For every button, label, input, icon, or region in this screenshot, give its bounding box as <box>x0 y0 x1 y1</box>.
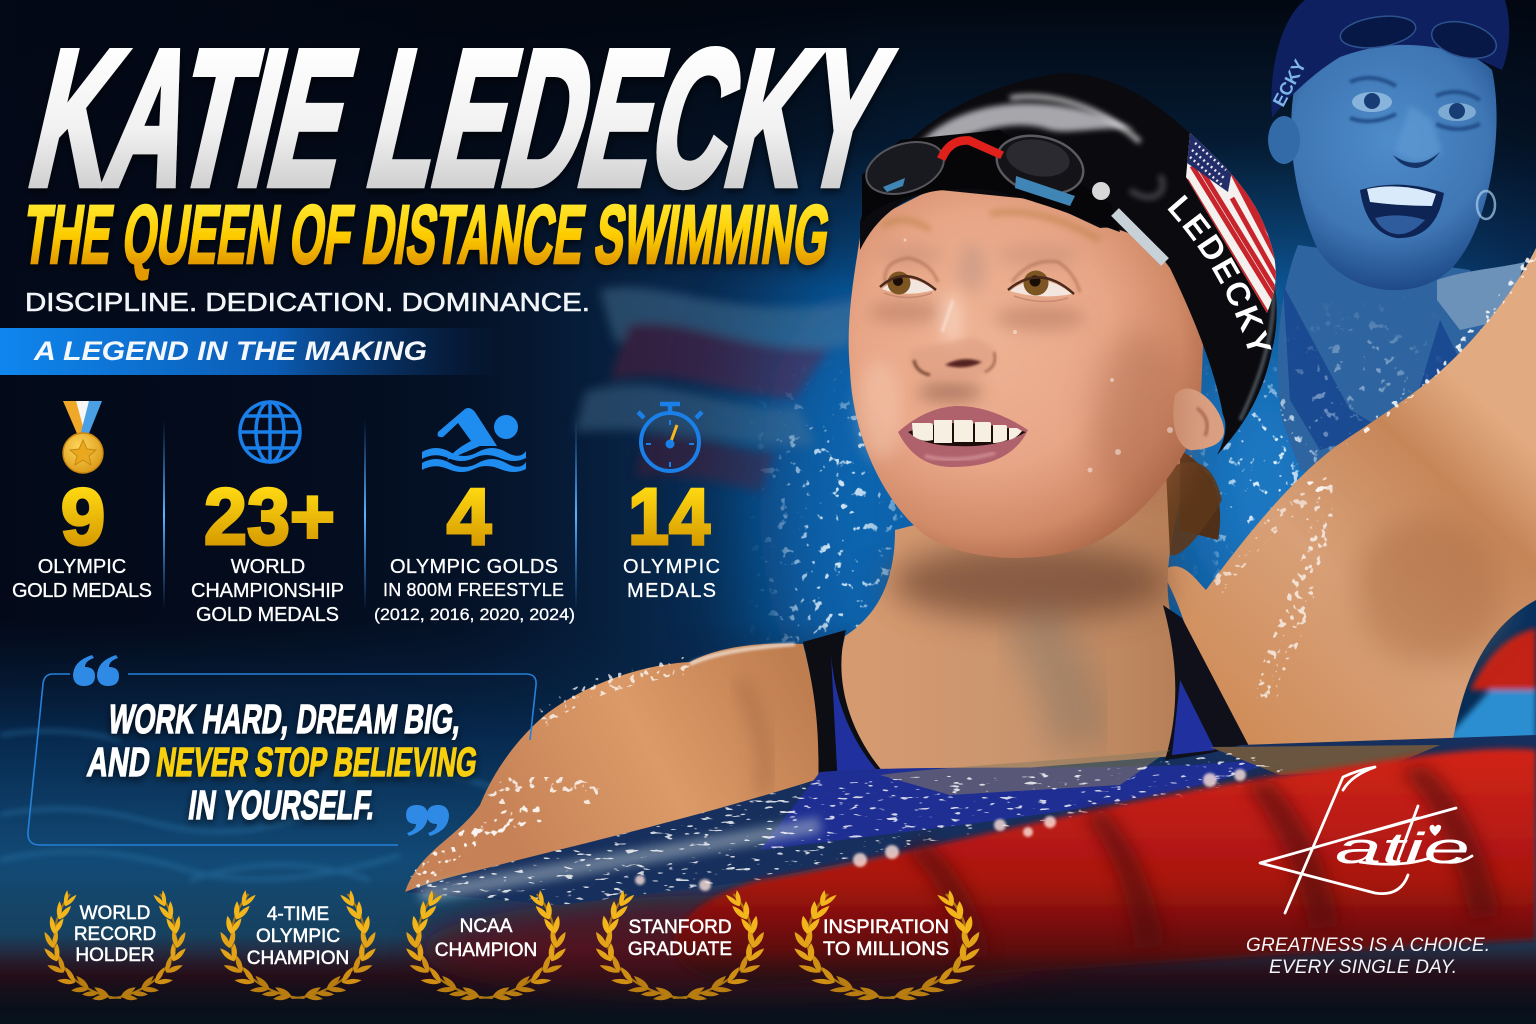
stat: 9 olympic gold medals: OLYMPIC <box>38 556 126 578</box>
quote text: IN YOURSELF. <box>186 782 378 828</box>
laurel wreath <box>404 890 568 1002</box>
quote text: AND <box>85 739 153 785</box>
stat: 23+ world championship gold medals: WORLD <box>231 556 305 578</box>
secondary portrait: blue-tinted celebrating swimmer: ECKY <box>1269 56 1310 110</box>
badge: inspiration to millions: INSPIRATION <box>823 917 949 938</box>
water surface with glints <box>405 735 1536 905</box>
stat: 9 olympic gold medals <box>12 401 152 602</box>
main portrait head <box>848 73 1277 558</box>
nose <box>909 300 996 380</box>
stat: 23+ world championship gold medals: 23+ <box>204 472 335 561</box>
stat: 23+ world championship gold medals: GOLD MEDALS <box>196 604 339 626</box>
raised right arm and shoulder <box>1162 248 1536 748</box>
water drops on face <box>904 238 1173 472</box>
icon: globe <box>240 402 300 462</box>
laurel wreath <box>218 890 378 1002</box>
stat: 14 olympic medals: MEDALS <box>627 580 716 602</box>
banner: a legend in the making: A LEGEND IN THE MAKING <box>33 336 427 366</box>
badge: NCAA champion <box>404 890 568 1002</box>
American flag on cap <box>1186 133 1276 313</box>
neck and chest <box>812 455 1250 785</box>
signature: Katie <box>1260 767 1472 913</box>
badge: world record holder: HOLDER <box>75 945 155 966</box>
badge: NCAA champion: NCAA <box>460 916 513 937</box>
lower pool water and ripples <box>0 620 1536 1024</box>
badge: world record holder: WORLD <box>80 903 150 924</box>
quote panel <box>28 655 536 845</box>
stat: 14 olympic medals <box>623 404 720 602</box>
facial shading <box>867 244 1086 402</box>
water splash around swimmer <box>790 330 1410 660</box>
smiling mouth <box>898 406 1028 467</box>
eyebrows <box>882 212 1100 240</box>
laurel wreath <box>594 890 766 1002</box>
quote text <box>85 696 480 828</box>
closing motto <box>1246 935 1490 978</box>
goggles on cap <box>860 127 1165 262</box>
red lane rope <box>0 749 1536 1024</box>
badge: inspiration to millions: TO MILLIONS <box>823 939 949 960</box>
badge: 4-time olympic champion: OLYMPIC <box>256 926 340 947</box>
stat: 4 olympic golds in 800m freestyle: (2012, 2016, 2020, 2024) <box>374 605 575 624</box>
badge: world record holder: RECORD <box>74 924 156 945</box>
badge: world record holder <box>42 890 188 1002</box>
laurel wreath <box>792 890 982 1002</box>
closing motto: EVERY SINGLE DAY. <box>1269 957 1457 978</box>
cap highlights <box>915 97 1274 420</box>
left arm resting on lane rope <box>405 644 818 892</box>
waving flag backdrop <box>575 287 860 492</box>
stat: 14 olympic medals: 14 <box>628 472 710 561</box>
closing quote mark <box>406 805 449 836</box>
secondary portrait: blue-tinted celebrating swimmer <box>1268 0 1525 490</box>
tagline: DISCIPLINE. DEDICATION. DOMINANCE. <box>25 287 590 317</box>
opening quote mark <box>73 655 119 686</box>
badge: 4-time olympic champion <box>218 890 378 1002</box>
badge: Stanford graduate: GRADUATE <box>628 939 732 960</box>
stat: 4 olympic golds in 800m freestyle: OLYMPIC GOLDS <box>390 556 558 578</box>
quote text: NEVER STOP BELIEVING <box>154 739 480 785</box>
stat dividers <box>163 420 577 610</box>
stat: 14 olympic medals: OLYMPIC <box>623 556 720 578</box>
icon: swimmer <box>422 408 526 472</box>
goggles on secondary cap <box>1338 12 1500 64</box>
LEDECKY cap lettering: LEDECKY <box>1168 194 1272 350</box>
swimsuit straps <box>803 605 1250 790</box>
icon: stopwatch <box>638 404 702 471</box>
right eye <box>1008 261 1080 302</box>
stat: 9 olympic gold medals: 9 <box>61 472 105 561</box>
closing motto: GREATNESS IS A CHOICE. <box>1246 935 1490 956</box>
signature: Katie: atie <box>1335 824 1470 873</box>
stat: 4 olympic golds in 800m freestyle: 4 <box>447 472 492 561</box>
badge: 4-time olympic champion: CHAMPION <box>247 948 349 969</box>
laurel wreath <box>42 890 188 1002</box>
icon: gold medal <box>63 401 103 473</box>
badge: Stanford graduate <box>594 890 766 1002</box>
badge: inspiration to millions <box>792 890 982 1002</box>
stat: 4 olympic golds in 800m freestyle <box>374 408 575 624</box>
black swim cap <box>860 73 1277 455</box>
stat: 9 olympic gold medals: GOLD MEDALS <box>12 580 152 602</box>
subtitle: THE QUEEN OF DISTANCE SWIMMING <box>18 188 835 281</box>
banner: a legend in the making <box>0 328 500 375</box>
stat: 23+ world championship gold medals: CHAMPIONSHIP <box>191 580 344 602</box>
left eye <box>880 258 938 298</box>
badge: Stanford graduate: STANFORD <box>628 917 732 938</box>
stat: 23+ world championship gold medals <box>191 402 344 626</box>
badge: 4-time olympic champion: 4-TIME <box>267 904 329 925</box>
stat: 4 olympic golds in 800m freestyle: IN 800M FREESTYLE <box>383 580 564 600</box>
quote text: WORK HARD, DREAM BIG, <box>106 696 464 742</box>
red rope far right and blue water behind arm <box>1440 628 1536 745</box>
badge: NCAA champion: CHAMPION <box>435 940 537 961</box>
